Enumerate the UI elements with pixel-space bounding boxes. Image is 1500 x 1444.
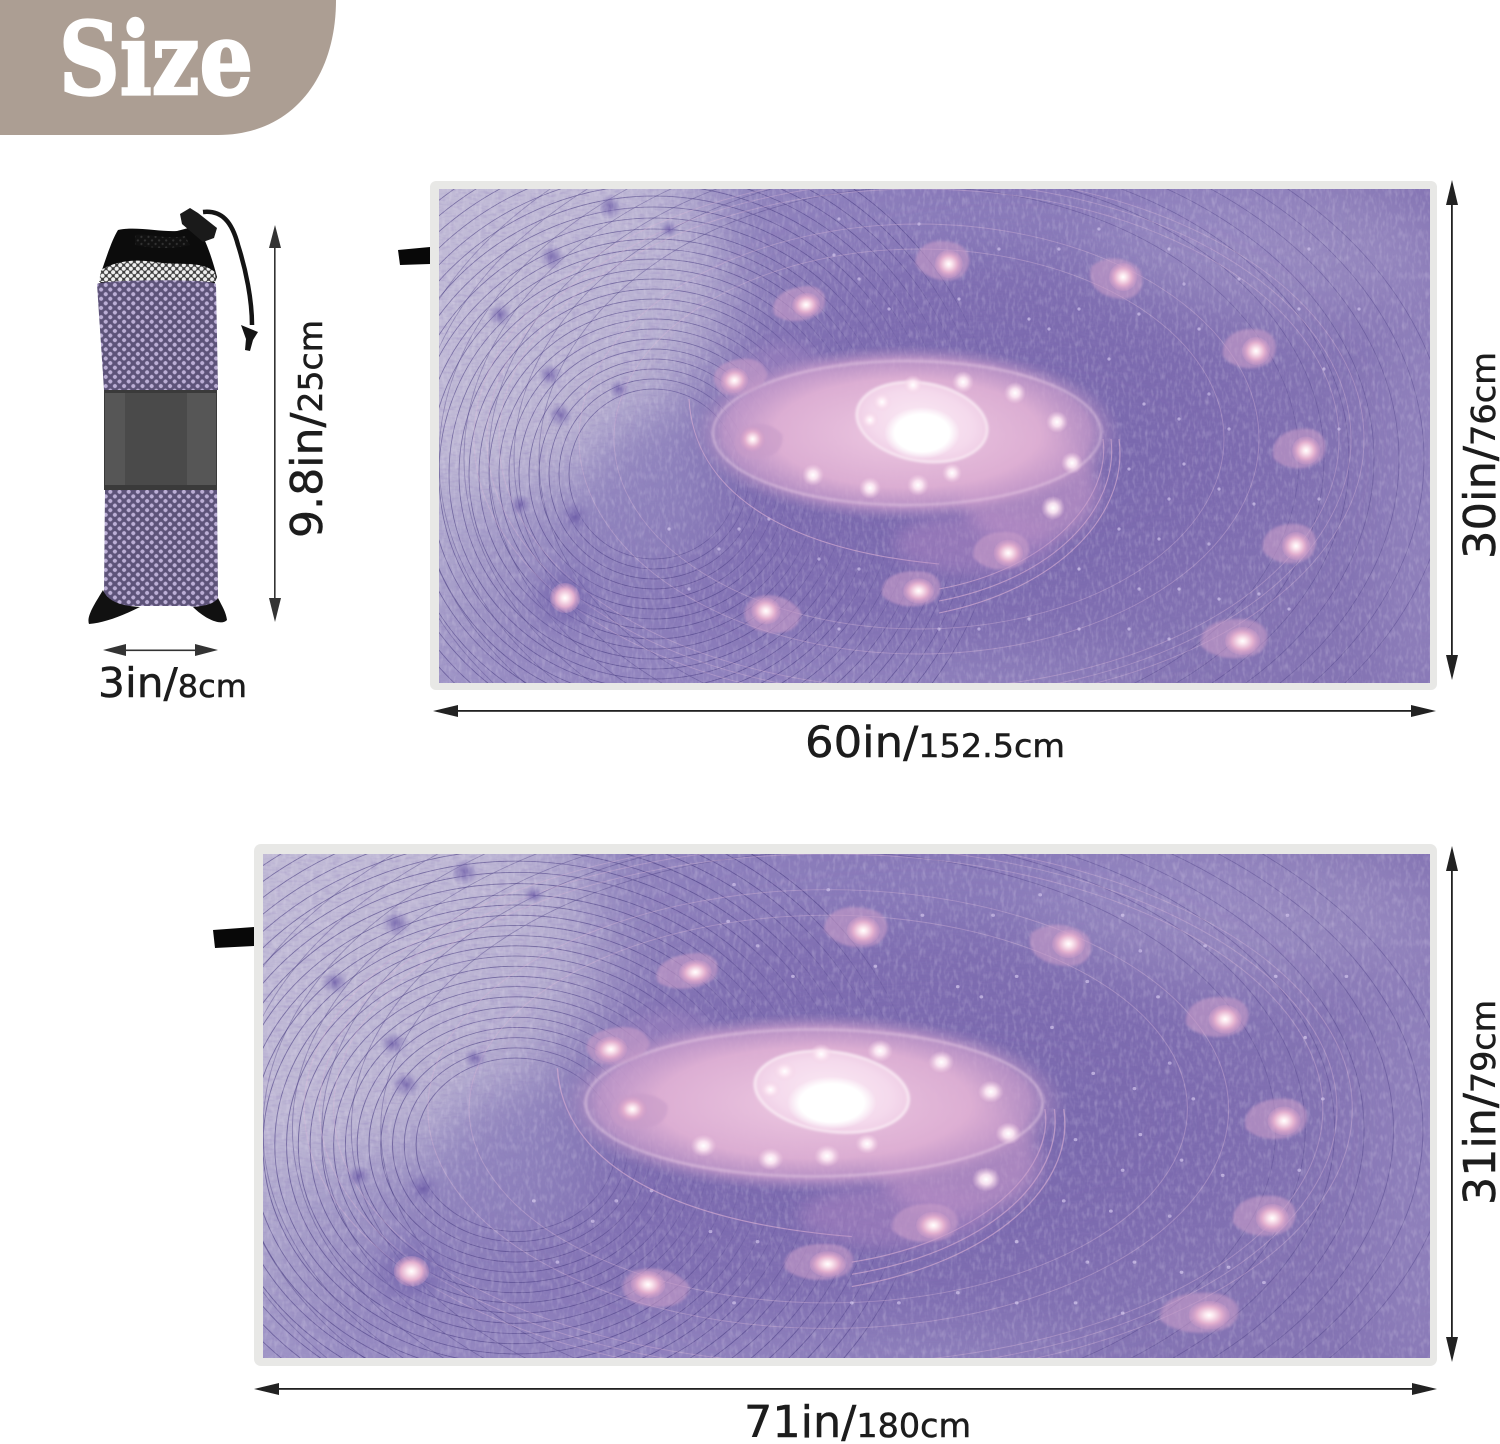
purple mesh upper bbox=[97, 280, 218, 390]
arrow: bag height bbox=[269, 225, 281, 622]
arrow: towel 60in width bbox=[433, 705, 1436, 717]
hanging loop bbox=[213, 927, 254, 948]
towel: 60 by 30 inch bbox=[269, 83, 1469, 835]
arrow: towel 31in height bbox=[1446, 846, 1458, 1362]
label: 60in width: 60in/152.5cm bbox=[805, 718, 1065, 768]
towel: 71 by 31 inch bbox=[63, 746, 1476, 1444]
white mesh band bbox=[99, 261, 216, 282]
drawstring cord bbox=[203, 212, 252, 325]
arrow: towel 30in height bbox=[1446, 180, 1458, 680]
label: bag height: 9.8in/25cm bbox=[282, 320, 333, 538]
title tab: Size bbox=[0, 0, 336, 135]
label: bag width: 3in/8cm bbox=[98, 659, 247, 707]
cord knot bbox=[241, 325, 258, 351]
bag feet bbox=[88, 590, 140, 624]
bag top black mesh bbox=[100, 226, 217, 285]
mesh bag product image bbox=[88, 208, 258, 624]
arrow: bag width bbox=[103, 644, 218, 656]
cord toggle bbox=[180, 208, 217, 242]
arrow: towel 71in width bbox=[254, 1383, 1437, 1395]
gray window band bbox=[104, 390, 217, 490]
title tab: Size: Size bbox=[59, 0, 253, 118]
purple mesh lower bbox=[104, 490, 218, 607]
hanging loop bbox=[398, 247, 430, 265]
bag top mesh texture bbox=[135, 235, 190, 248]
